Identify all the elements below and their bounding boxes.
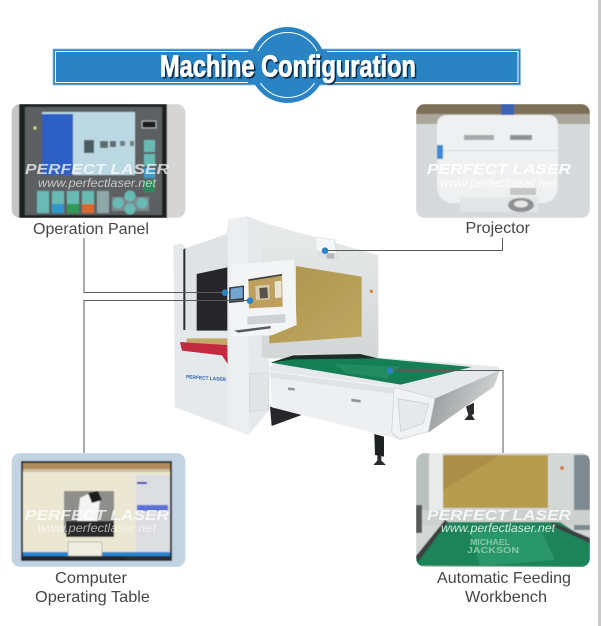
- panel: automatic feeding workbench photo: [416, 453, 590, 567]
- label: automatic feeding workbench: Automatic Feeding: [437, 570, 571, 587]
- panel: computer operating table photo: [12, 453, 186, 567]
- red strip: [180, 342, 228, 364]
- label: automatic feeding workbench: [437, 570, 571, 606]
- brand text: PERFECT LASER: [186, 374, 227, 383]
- watermark: [25, 510, 169, 534]
- callout dots: [222, 247, 393, 374]
- machine illustration: [173, 216, 500, 465]
- title banner: [53, 27, 520, 103]
- label: operation panel: Operation Panel: [33, 221, 149, 238]
- projector body: [316, 237, 339, 260]
- watermark: PERFECT LASER: [25, 161, 169, 178]
- label: automatic feeding workbench: Workbench: [465, 589, 547, 606]
- under-table shadow: [270, 407, 302, 426]
- panel: projector photo: [416, 104, 590, 218]
- table corner: [392, 387, 435, 439]
- label: computer operating table: [35, 570, 150, 606]
- page edge: [598, 0, 601, 626]
- watermark: www.perfectlaser.net: [38, 521, 157, 535]
- projected text: MICHAEL: [470, 537, 510, 547]
- monitor housing: [229, 259, 297, 336]
- emergency button: [233, 275, 239, 280]
- gold strip: [187, 338, 227, 345]
- side panel: [249, 373, 269, 412]
- buttons strip: [247, 314, 285, 325]
- watermark: [25, 164, 169, 190]
- table side: [428, 370, 500, 433]
- projected text: JACKSON: [467, 545, 519, 555]
- touch panel: [229, 285, 244, 303]
- table top frame: [269, 354, 500, 398]
- legs: [374, 434, 384, 457]
- green belt: [271, 355, 472, 385]
- watermark: [427, 164, 571, 190]
- projected text: [467, 539, 518, 553]
- watermark: PERFECT LASER: [25, 507, 169, 524]
- dark window: [197, 267, 227, 331]
- watermark: www.perfectlaser.net: [440, 176, 557, 190]
- label: computer operating table: Operating Table: [35, 589, 150, 606]
- connector lines: [84, 238, 503, 453]
- left cabinet: [173, 216, 269, 435]
- monitor screen: [248, 274, 283, 308]
- watermark: www.perfectlaser.net: [38, 176, 157, 190]
- title: Machine Configuration: [160, 48, 416, 84]
- table front: [270, 372, 400, 439]
- label: computer operating table: Computer: [55, 570, 128, 587]
- keyboard: [234, 326, 271, 333]
- gold panel: [269, 266, 362, 343]
- watermark: PERFECT LASER: [427, 507, 571, 524]
- watermark: www.perfectlaser.net: [441, 521, 556, 535]
- title: Machine Configuration: [162, 50, 418, 85]
- panel: operation panel photo: [12, 104, 186, 218]
- label: projector: Projector: [466, 220, 531, 237]
- back wall: [247, 222, 378, 358]
- watermark: [427, 510, 571, 534]
- watermark: PERFECT LASER: [427, 161, 571, 178]
